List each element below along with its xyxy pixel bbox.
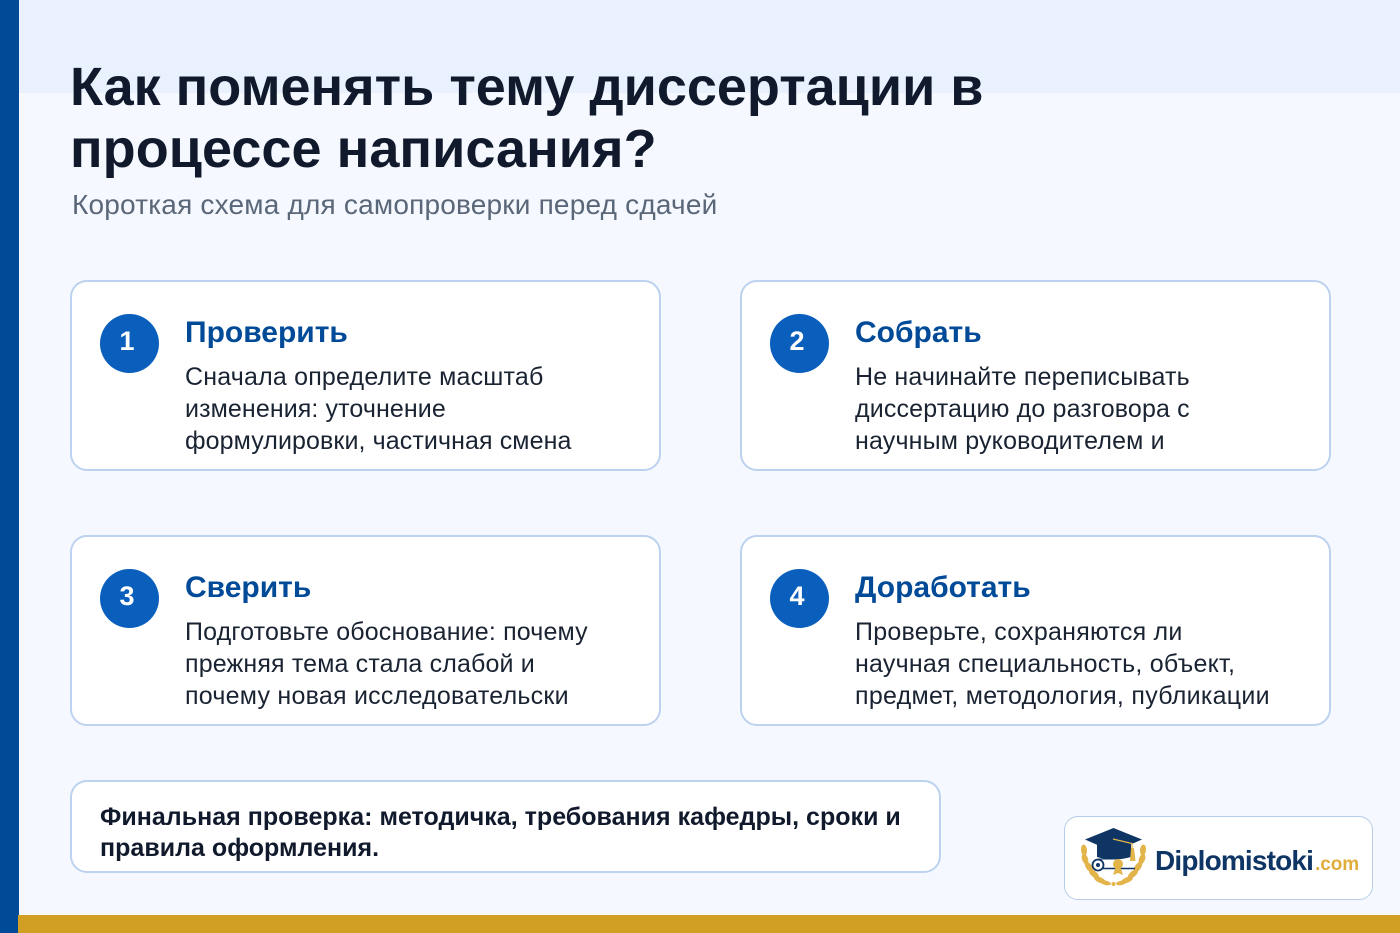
text: step 1: изменения: уточнение [185, 395, 446, 423]
heading: step 2: Собрать [855, 316, 982, 349]
callout text: Финальная проверка: методичка, требования кафедры, сроки и [100, 803, 901, 831]
callout text: правила оформления. [100, 834, 379, 862]
text: step 1: Сначала определите масштаб [185, 363, 544, 391]
callout text [100, 803, 901, 862]
bottom gold bar [18, 915, 1400, 933]
badge 1: 1 [119, 326, 135, 356]
badge 3: 3 [119, 581, 135, 611]
panel: step 1 [70, 280, 661, 471]
text: step 2: диссертацию до разговора с [855, 395, 1190, 423]
icon: graduation cap with laurel [1081, 828, 1146, 886]
text: step 3: прежняя тема стала слабой и [185, 650, 535, 678]
text: step 4 [855, 618, 1270, 710]
text: step 1 [185, 363, 572, 455]
text: step 4: предмет, методология, публикации [855, 682, 1270, 710]
text: step 1: формулировки, частичная смена [185, 427, 572, 455]
text: step 3: почему новая исследовательски [185, 682, 569, 710]
subtitle: Короткая схема для самопроверки перед сдачей [72, 189, 717, 220]
badge 4 [770, 569, 829, 628]
callout: final check [70, 780, 941, 873]
heading: step 1: Проверить [185, 316, 348, 349]
title: Как поменять тему диссертации в [70, 57, 983, 117]
logo wordmark: Diplomistoki.com [1155, 845, 1359, 876]
panel: step 4 [740, 535, 1331, 726]
text: step 4: Проверьте, сохраняются ли [855, 618, 1183, 646]
text: step 2 [855, 363, 1190, 455]
logo card [1064, 816, 1373, 900]
left accent bar [0, 0, 19, 933]
header band [19, 0, 1400, 93]
badge 2: 2 [789, 326, 805, 356]
text: step 3: Подготовьте обоснование: почему [185, 618, 588, 646]
badge 4: 4 [789, 581, 805, 611]
panel: step 2 [740, 280, 1331, 471]
text: step 4: научная специальность, объект, [855, 650, 1235, 678]
heading: step 4: Доработать [855, 571, 1031, 604]
text: step 2: научным руководителем и [855, 427, 1165, 455]
text: step 3 [185, 618, 588, 710]
title: процессе написания? [70, 119, 657, 179]
text: step 2: Не начинайте переписывать [855, 363, 1190, 391]
badge 3 [100, 569, 159, 628]
title [70, 57, 983, 179]
panel: step 3 [70, 535, 661, 726]
badge 1 [100, 314, 159, 373]
heading: step 3: Сверить [185, 571, 311, 604]
badge 2 [770, 314, 829, 373]
